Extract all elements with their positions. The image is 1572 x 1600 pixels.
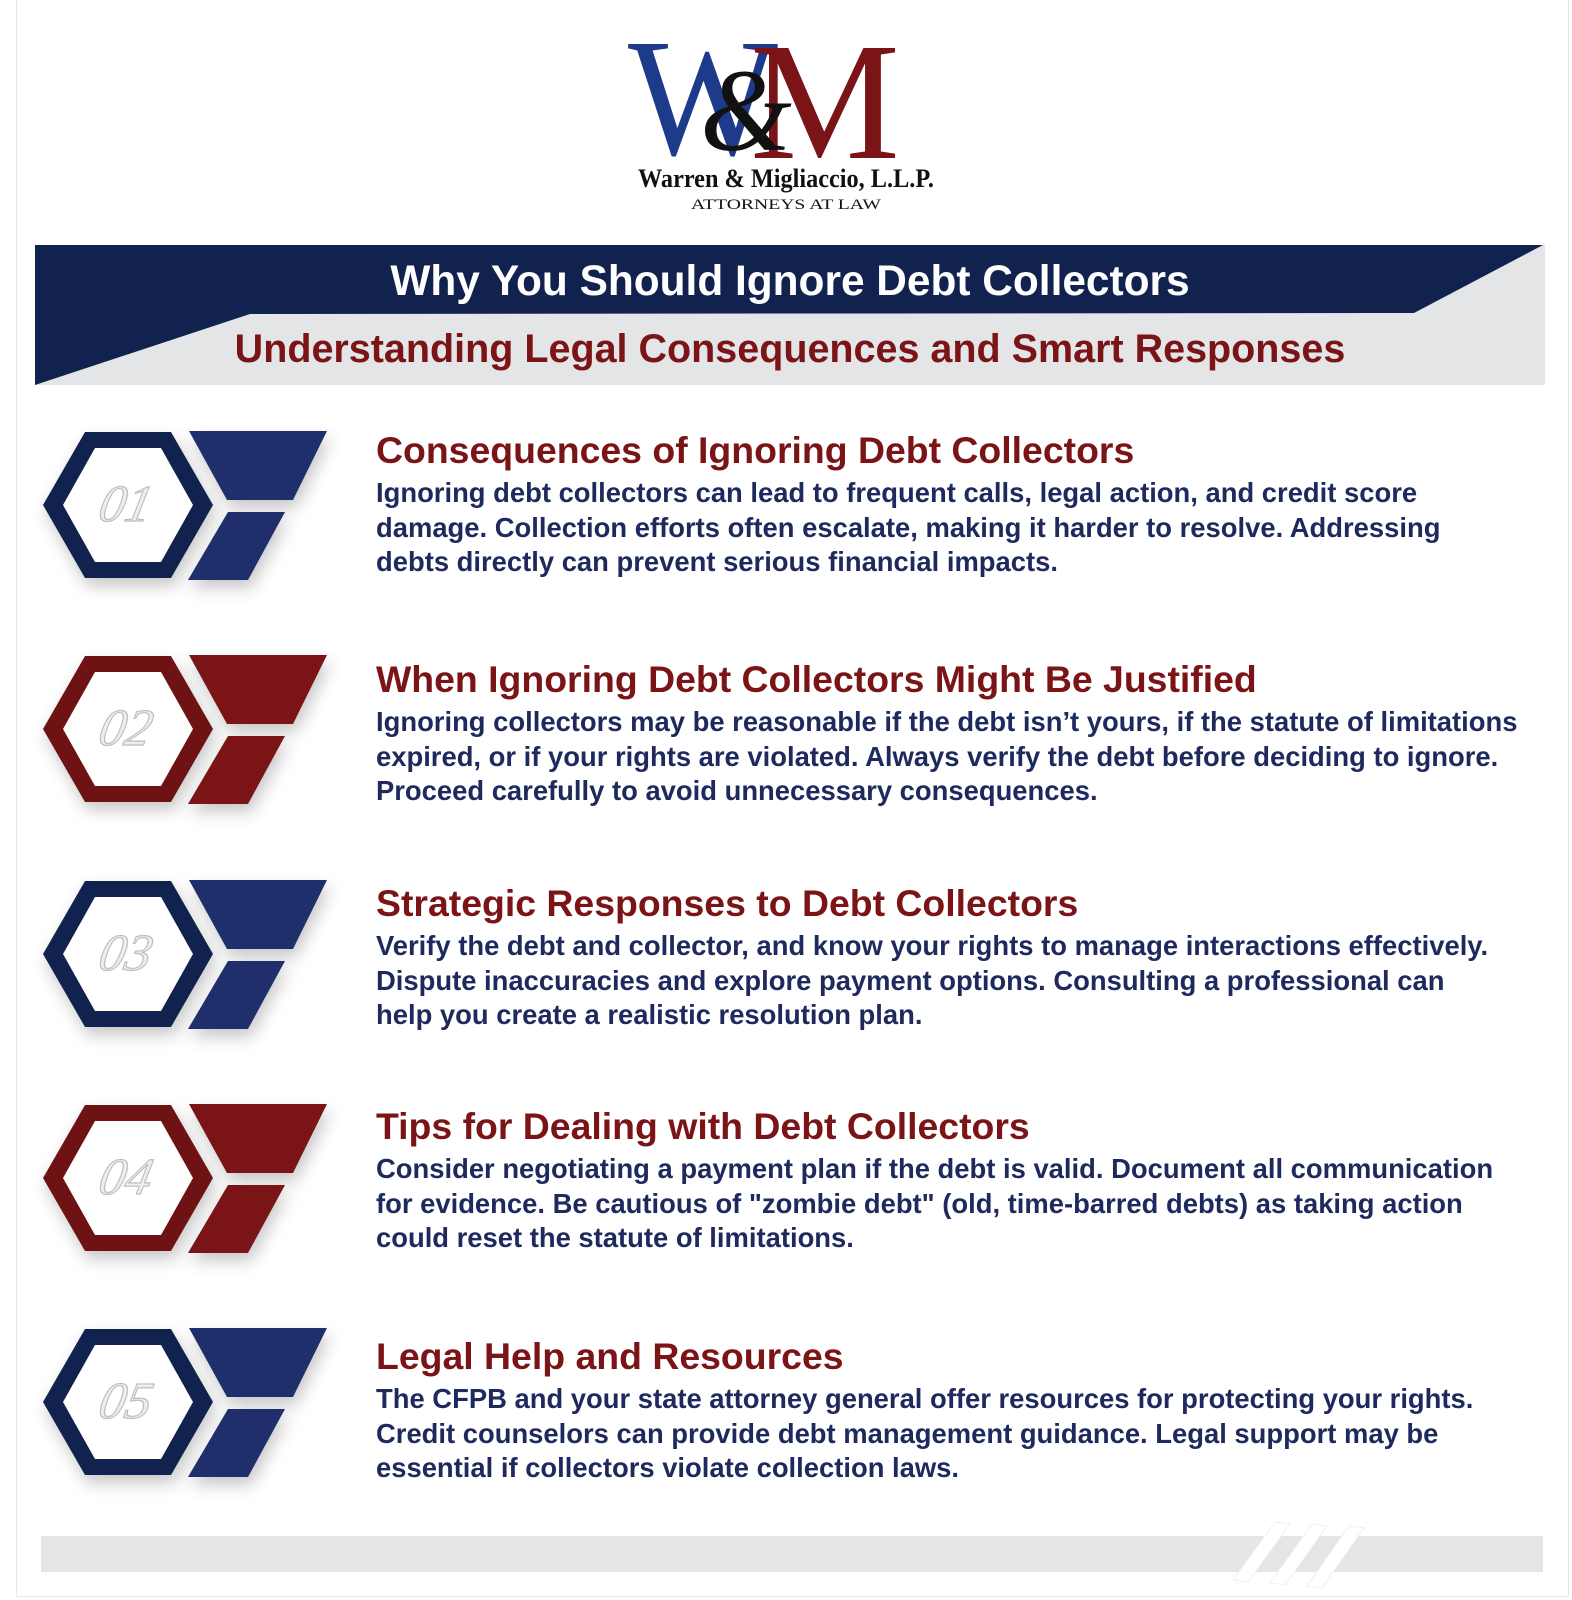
- icon 01: [41, 431, 333, 596]
- icon 05: 05: [94, 1373, 158, 1430]
- section 5 body: [376, 1383, 1473, 1483]
- section 1 body: Ignoring debt collectors can lead to frequent calls, legal action, and credit score: [376, 477, 1417, 508]
- icon 03: 03: [94, 925, 158, 982]
- section 5 heading: Legal Help and Resources: [376, 1335, 844, 1377]
- icon 04: [41, 1104, 333, 1269]
- header banner: [35, 245, 1545, 385]
- subtitle: Understanding Legal Consequences and Smart Responses: [235, 327, 1345, 371]
- section 1 body: [376, 477, 1440, 577]
- section 1 body: damage. Collection efforts often escalate, making it harder to resolve. Addressing: [376, 512, 1440, 542]
- logo: &: [700, 45, 792, 176]
- icon 02: 02: [94, 700, 158, 757]
- section 3 body: [376, 930, 1488, 1030]
- section 2 body: Proceed carefully to avoid unnecessary consequences.: [376, 775, 1098, 806]
- logo: Warren & Migliaccio, L.L.P.: [638, 164, 934, 193]
- icon 05: [41, 1328, 333, 1493]
- section 4 body: for evidence. Be cautious of "zombie debt" (old, time-barred debts) as taking action: [376, 1188, 1463, 1218]
- section 2 body: [376, 706, 1517, 806]
- section 4 heading: Tips for Dealing with Debt Collectors: [376, 1105, 1030, 1147]
- section 5 body: Credit counselors can provide debt management guidance. Legal support may be: [376, 1418, 1438, 1448]
- section 3 body: Verify the debt and collector, and know your rights to manage interactions effectively.: [376, 930, 1488, 961]
- section 1 heading: Consequences of Ignoring Debt Collectors: [376, 429, 1134, 471]
- section 3 body: Dispute inaccuracies and explore payment options. Consulting a professional can: [376, 964, 1444, 996]
- section 4 body: Consider negotiating a payment plan if the debt is valid. Document all communication: [376, 1153, 1493, 1184]
- section 2 body: Ignoring collectors may be reasonable if the debt isn’t yours, if the statute of limitations: [376, 706, 1517, 737]
- icon 04: 04: [94, 1149, 158, 1206]
- section 5 body: essential if collectors violate collection laws.: [376, 1452, 959, 1483]
- logo: [628, 24, 934, 213]
- section 5 body: The CFPB and your state attorney general offer resources for protecting your rights.: [376, 1383, 1473, 1414]
- icon 01: 01: [94, 476, 158, 533]
- logo: ATTORNEYS AT LAW: [691, 197, 882, 213]
- title: Why You Should Ignore Debt Collectors: [390, 257, 1190, 304]
- footer bar: [41, 1522, 1543, 1588]
- section 2 body: expired, or if your rights are violated. Always verify the debt before deciding to ignore.: [376, 740, 1498, 772]
- section 2 heading: When Ignoring Debt Collectors Might Be Justified: [376, 658, 1257, 700]
- section 4 body: could reset the statute of limitations.: [376, 1222, 854, 1253]
- section 3 body: help you create a realistic resolution plan.: [376, 999, 922, 1030]
- icon 02: [41, 655, 333, 820]
- section 4 body: [376, 1153, 1493, 1253]
- section 3 heading: Strategic Responses to Debt Collectors: [376, 882, 1078, 924]
- icon 03: [41, 880, 333, 1045]
- section 1 body: debts directly can prevent serious financial impacts.: [376, 546, 1058, 577]
